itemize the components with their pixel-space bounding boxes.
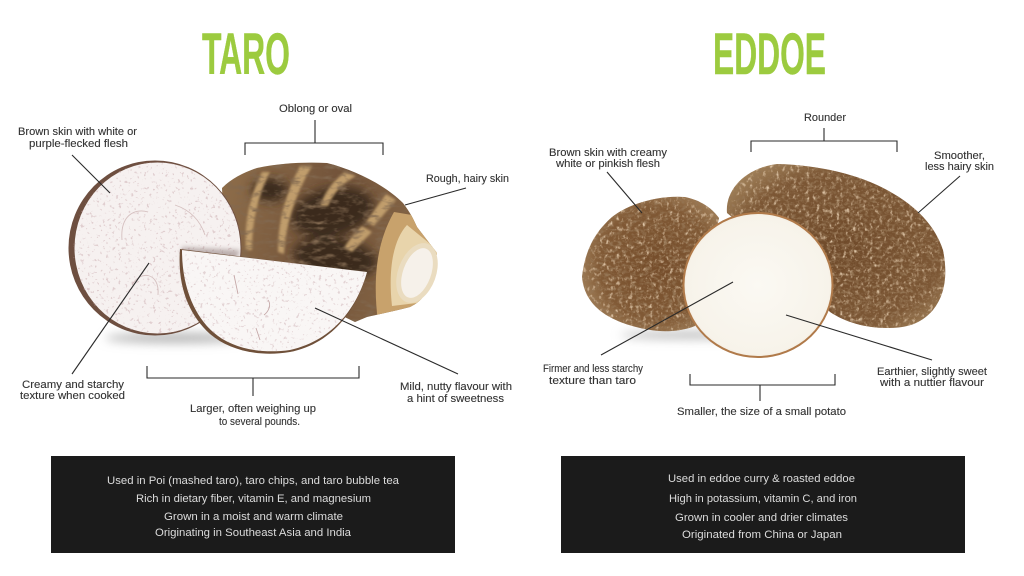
- left whole eddoe: [582, 196, 719, 332]
- label: firmer and less starchy: Firmer and less starchy: [543, 363, 643, 375]
- whole taro body: [218, 160, 445, 325]
- label: brown skin with white or purple-flecked flesh: Brown skin with white or: [18, 126, 137, 138]
- bracket: smaller: [690, 374, 835, 401]
- leader: mild flavour: [315, 308, 458, 374]
- label: rough, hairy skin: Rough, hairy skin: [426, 173, 509, 185]
- leader: creamy texture: [72, 263, 149, 374]
- title: TARO: TARO: [202, 22, 290, 87]
- panel: eddoe: [543, 22, 994, 553]
- label: mild, nutty flavour: [400, 381, 512, 405]
- label: smaller: Smaller, the size of a small potato: [677, 406, 846, 418]
- bracket: rounder: [751, 128, 897, 152]
- label: mild, nutty flavour: Mild, nutty flavour with: [400, 381, 512, 393]
- bracket: larger: [147, 366, 359, 396]
- illustration: taro root: [68, 160, 445, 354]
- label: creamy and starchy: [20, 379, 125, 402]
- facts box: taro: Used in Poi (mashed taro), taro chips, and taro bubble tea: [107, 475, 400, 487]
- leader: firmer texture: [601, 282, 733, 355]
- illustration: eddoe roots: [578, 160, 950, 358]
- facts box: taro: [51, 456, 455, 553]
- right whole eddoe: [725, 160, 950, 335]
- label: brown skin with creamy: Brown skin with creamy: [549, 147, 667, 159]
- leader: brown skin: [607, 172, 642, 213]
- label: larger, several pounds: [190, 403, 316, 428]
- facts box: eddoe: Originated from China or Japan: [682, 529, 842, 541]
- facts box: taro: Grown in a moist and warm climate: [164, 511, 343, 523]
- facts box: taro: Originating in Southeast Asia and India: [155, 527, 352, 539]
- label: earthier: [877, 366, 987, 389]
- label: smoother, less hairy: [925, 150, 994, 173]
- facts box: taro: Rich in dietary fiber, vitamin E, and magnesium: [136, 493, 371, 505]
- label: earthier: Earthier, slightly sweet: [877, 366, 987, 378]
- label: brown skin with white or purple-flecked flesh: [18, 126, 137, 150]
- shadow: [620, 331, 760, 339]
- leader: brown skin: [72, 155, 110, 193]
- label: larger, several pounds: Larger, often weighing up: [190, 403, 316, 415]
- shadow: [105, 333, 245, 343]
- leader: earthier flavour: [786, 315, 932, 360]
- facts box: eddoe: Grown in cooler and drier climates: [675, 512, 849, 524]
- panel: taro: [18, 22, 512, 553]
- label: larger, several pounds: to several pounds.: [219, 416, 300, 428]
- label: creamy and starchy: Creamy and starchy: [22, 379, 125, 391]
- leader: smoother skin: [918, 176, 960, 213]
- label: smoother, less hairy: Smoother,: [934, 150, 985, 162]
- label: smoother, less hairy: less hairy skin: [925, 161, 994, 173]
- label: creamy and starchy: texture when cooked: [20, 390, 125, 402]
- cut face: [682, 212, 834, 358]
- title: EDDOE: EDDOE: [713, 22, 826, 87]
- label: firmer and less starchy: texture than taro: [549, 375, 636, 387]
- label: oblong or oval: Oblong or oval: [279, 103, 352, 115]
- bracket: oblong or oval: [245, 120, 383, 155]
- facts box: eddoe: High in potassium, vitamin C, and iron: [669, 493, 857, 505]
- label: mild, nutty flavour: a hint of sweetness: [407, 393, 505, 405]
- label: earthier: with a nuttier flavour: [879, 377, 984, 389]
- facts box: eddoe: Used in eddoe curry & roasted eddoe: [668, 473, 855, 485]
- half slice: [180, 248, 368, 354]
- label: brown skin with creamy: white or pinkish flesh: [555, 158, 660, 170]
- leader: rough skin: [405, 188, 466, 205]
- facts box: eddoe: [561, 456, 965, 553]
- round slice: [68, 160, 242, 336]
- label: brown skin with creamy: [549, 147, 667, 170]
- label: brown skin with white or purple-flecked flesh: purple-flecked flesh: [29, 138, 128, 150]
- label: firmer and less starchy: [543, 363, 643, 387]
- label: rounder: Rounder: [804, 112, 846, 124]
